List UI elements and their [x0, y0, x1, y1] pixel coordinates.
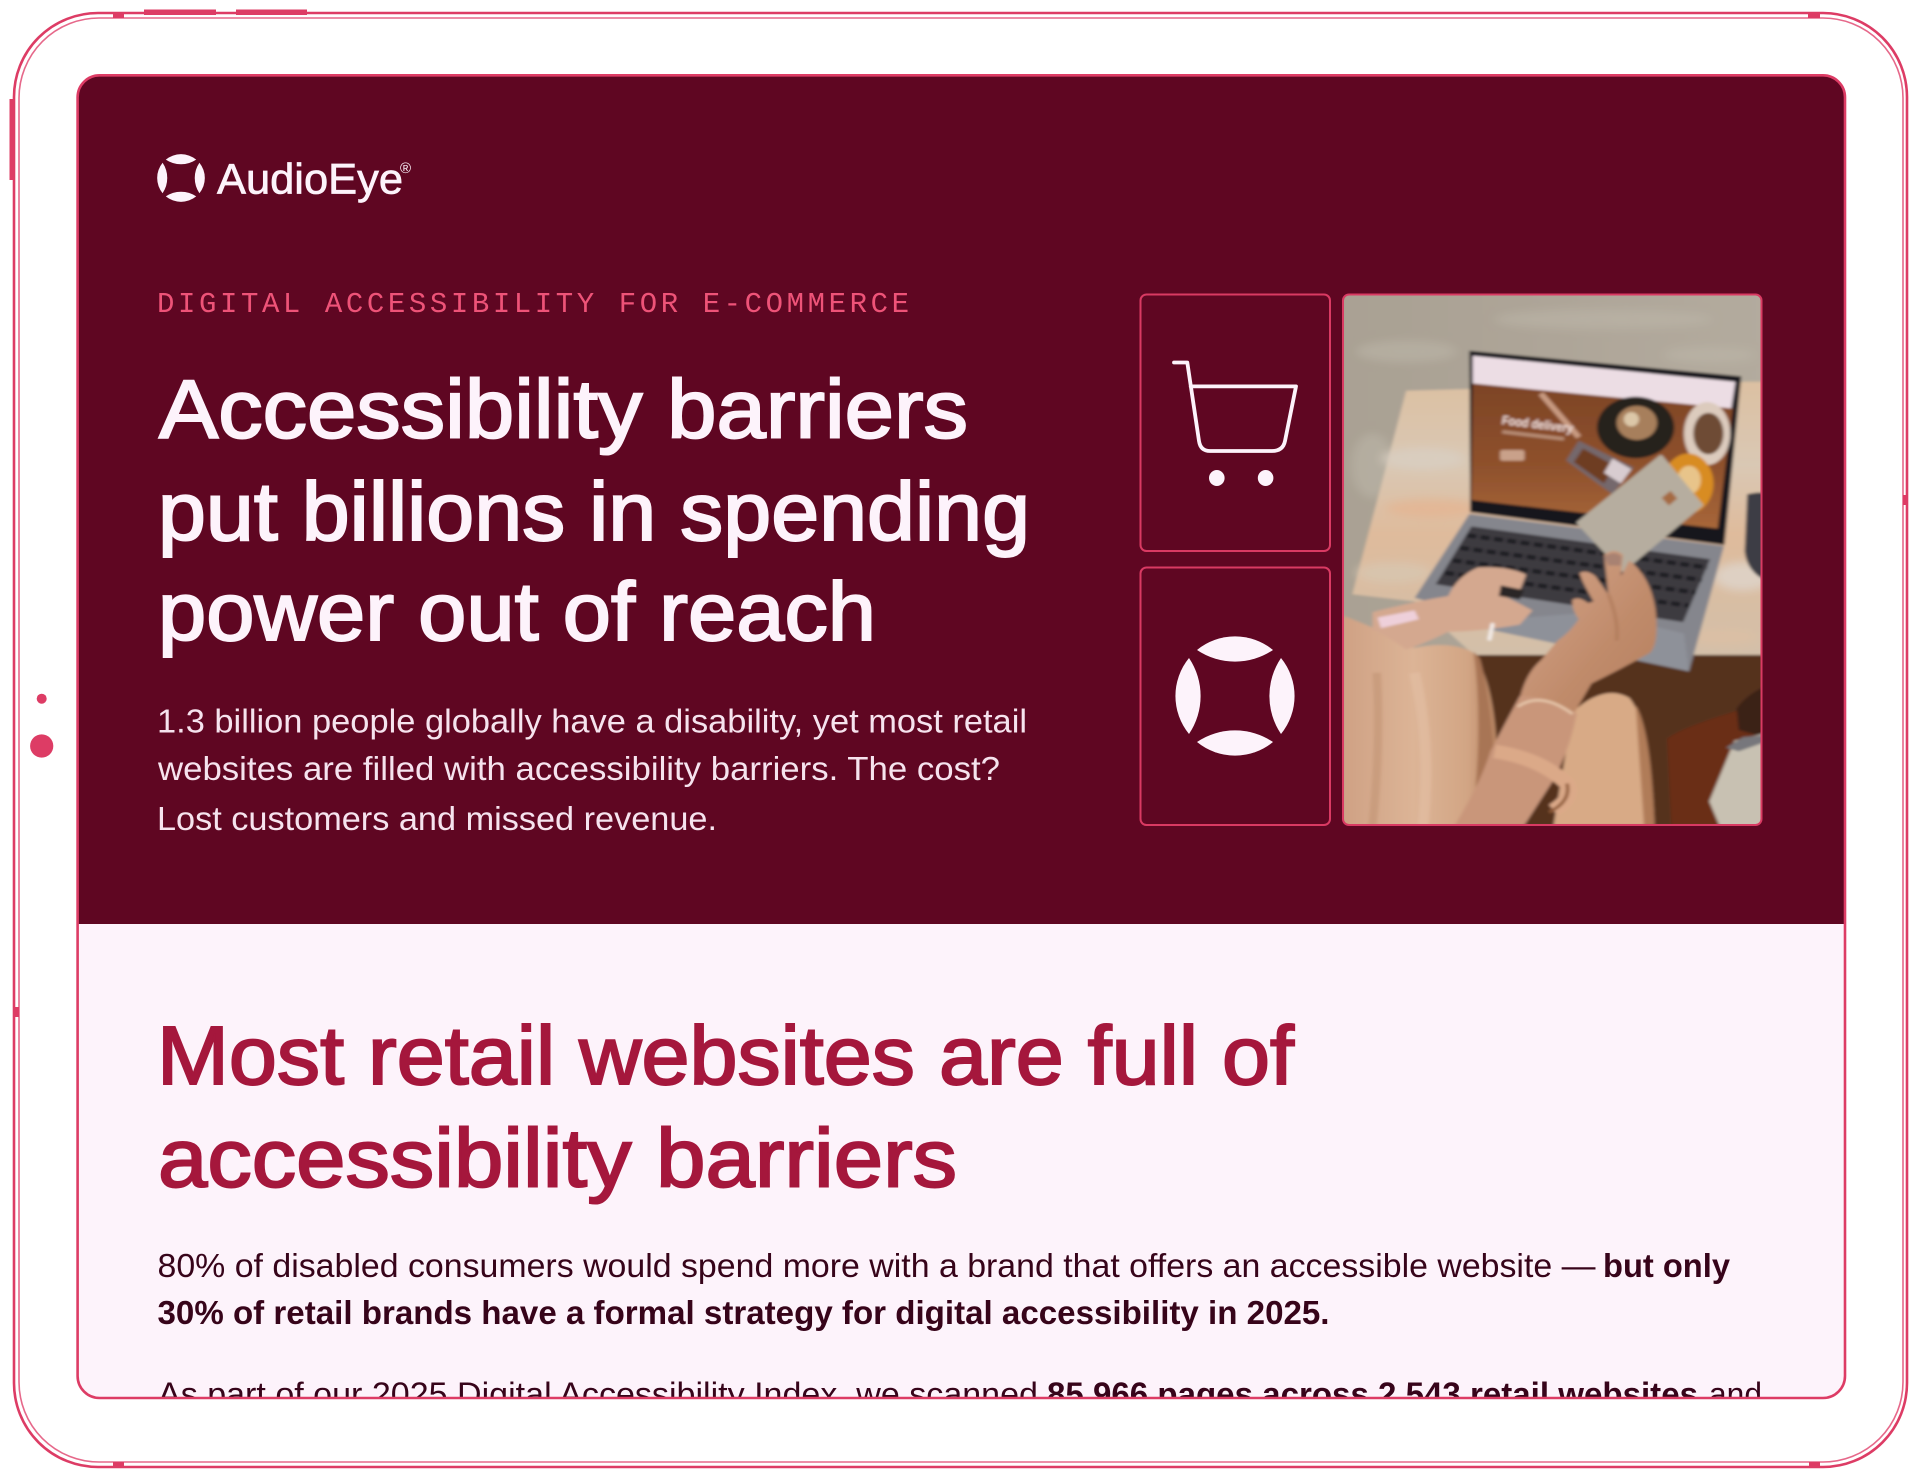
- hero description: 1.3 billion people globally have a disability, yet most retail: [157, 703, 1027, 740]
- paragraph: index scan (clipped): 85,966 pages across 2,543 retail websites: [1047, 1376, 1698, 1413]
- section heading: [157, 1009, 1295, 1205]
- photo: person paying with a card at a laptop: [1339, 291, 1772, 830]
- icon: AudioEye mark: [157, 154, 205, 202]
- title: put billions in spending: [158, 465, 1030, 558]
- hero description: Lost customers and missed revenue.: [157, 800, 717, 837]
- paragraph: spending statistic: 30% of retail brands have a formal strategy for digital accessibility in 2025.: [158, 1294, 1330, 1331]
- photo: person paying with a card at a laptop: Food delivery: [1501, 412, 1574, 435]
- title: [158, 362, 1030, 658]
- paragraph: index scan (clipped): and: [1709, 1376, 1762, 1413]
- camera dots: [30, 694, 53, 758]
- hero description: websites are filled with accessibility barriers. The cost?: [157, 750, 1000, 787]
- title: Accessibility barriers: [159, 362, 968, 456]
- paragraph: index scan (clipped): [162, 1382, 1760, 1397]
- card: shopping cart: [1140, 294, 1330, 551]
- icon: shopping cart: [1174, 362, 1296, 486]
- hero description: [157, 703, 1027, 837]
- paragraph: index scan (clipped): As part of our 2025 Digital Accessibility Index, we scanned: [158, 1376, 1038, 1413]
- registered mark: ®: [400, 160, 411, 177]
- photo border: [1343, 294, 1762, 825]
- section heading: Most retail websites are full of: [157, 1009, 1295, 1102]
- section heading: accessibility barriers: [158, 1112, 957, 1205]
- paragraph: spending statistic: [158, 1247, 1731, 1331]
- paragraph: spending statistic: but only: [1603, 1247, 1731, 1284]
- title: power out of reach: [158, 565, 876, 658]
- icon: large AudioEye mark: [1175, 636, 1295, 756]
- paragraph: spending statistic: 80% of disabled consumers would spend more with a brand that offers an accessible website —: [158, 1247, 1596, 1284]
- logo wordmark: AudioEye: [217, 155, 403, 203]
- logo: [157, 154, 411, 203]
- card: logo mark: [1140, 568, 1330, 825]
- eyebrow: DIGITAL ACCESSIBILITY FOR E-COMMERCE: [157, 288, 909, 321]
- panel: hero background: [77, 75, 1846, 924]
- panel: lower section background: [77, 924, 1846, 1399]
